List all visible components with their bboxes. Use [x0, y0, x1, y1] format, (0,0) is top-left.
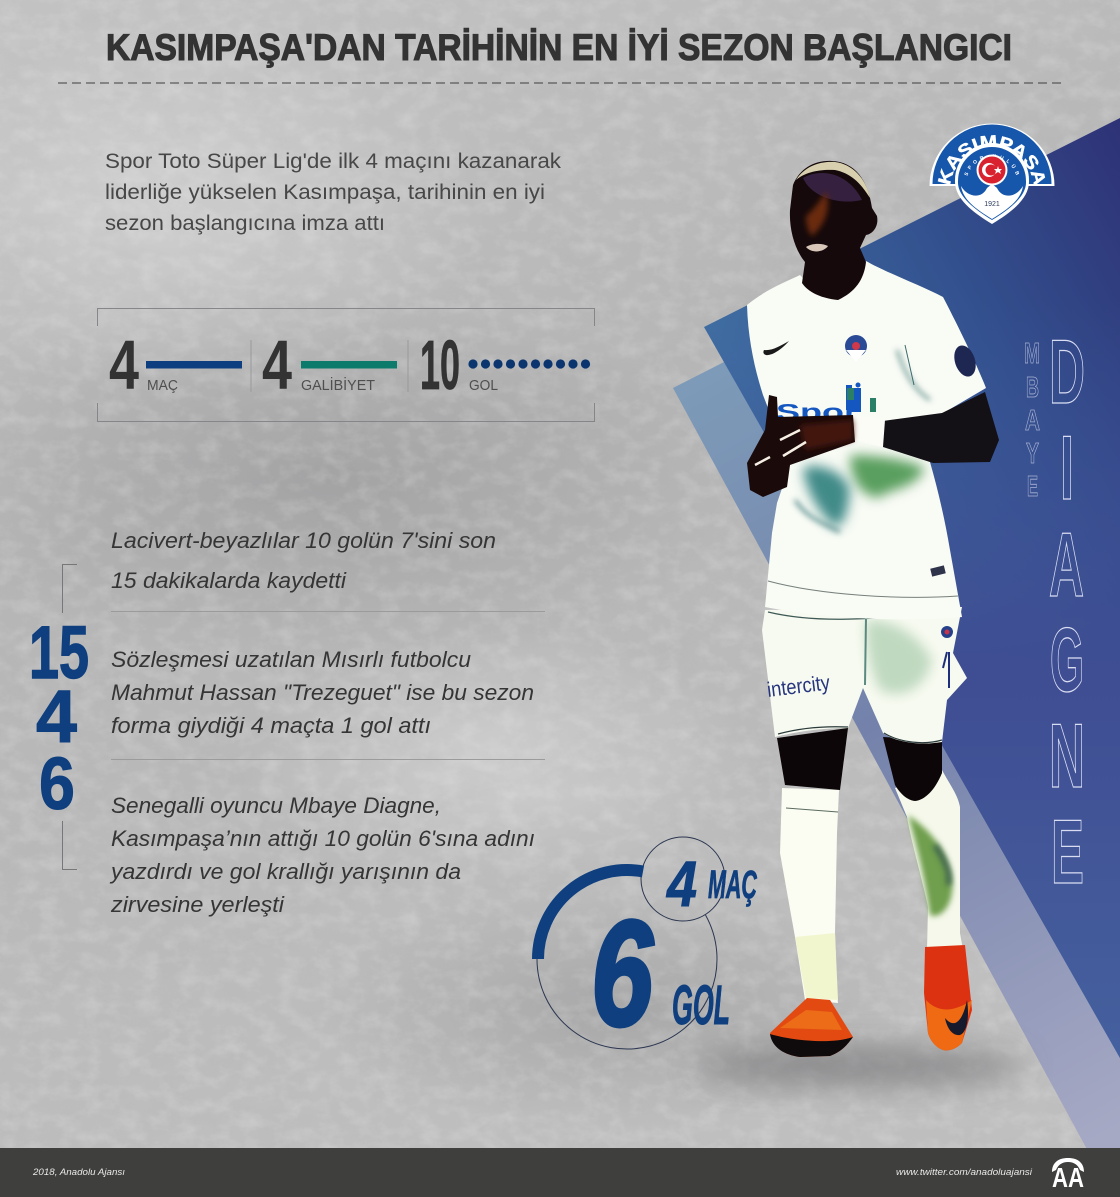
light blue triangle — [673, 160, 1120, 1197]
player: knees — [777, 728, 942, 801]
italic text blocks — [109, 528, 545, 917]
jersey: sponsor: Spor — [776, 399, 858, 425]
jersey: hem tag — [930, 565, 946, 577]
player: right arm — [883, 392, 999, 463]
stat: 4 wins: GALİBİYET — [301, 376, 375, 394]
stat: 10 goals: 10 — [420, 326, 460, 404]
text: last 15 minutes: Lacivert-beyazlılar 10 golün 7'sini son — [111, 528, 496, 553]
player: wristband — [853, 415, 885, 447]
value: 4: 4 — [665, 848, 697, 920]
player: shorts — [762, 607, 967, 744]
label: MAÇ: MAÇ — [708, 863, 757, 907]
vertical name: Mbaye: Y — [1026, 438, 1039, 470]
stat: 4 matches: 4 — [109, 326, 139, 404]
thick arc — [538, 870, 643, 959]
vertical name: Mbaye — [1024, 338, 1040, 503]
crest: banner text: KASIMPAŞA — [938, 135, 1046, 184]
vertical name: Diagne: E — [1051, 802, 1084, 903]
text: last 15 minutes — [111, 528, 496, 593]
text: Trezeguet: forma giydiği 4 maçta 1 gol attı — [111, 713, 431, 738]
player photo illustration — [747, 161, 999, 1057]
intro paragraph: Spor Toto Süper Lig'de ilk 4 maçını kazanarak — [105, 150, 562, 173]
vertical name: Mbaye: M — [1024, 338, 1040, 370]
footer bar — [0, 1148, 1120, 1197]
text: Mbaye Diagne: Senegalli oyuncu Mbaye Diagne, — [111, 793, 441, 818]
value: 6: 6 — [591, 889, 654, 1057]
vertical name: Diagne — [1049, 322, 1085, 903]
crest: year: 1921 — [984, 201, 1000, 208]
dark blue triangle — [704, 118, 1120, 1058]
icon: AA logo: AA — [1052, 1162, 1084, 1193]
footer: credit: 2018, Anadolu Ajansı — [32, 1167, 125, 1178]
ground shadow — [695, 1046, 1025, 1086]
vertical name: Diagne: A — [1049, 515, 1084, 616]
stat: 4 wins: 4 — [262, 326, 292, 404]
crest: spor kulübü: SPOR KULÜBÜ — [964, 154, 1020, 176]
goals and matches circle chart — [537, 837, 757, 1057]
sponsor: intercity: intercity — [766, 671, 832, 702]
crest: flag circle — [976, 154, 1008, 186]
jersey: crest — [845, 335, 867, 362]
stat: 4 matches: MAÇ — [147, 377, 178, 394]
text: Trezeguet: Mahmut Hassan "Trezeguet" ise bu sezon — [111, 680, 534, 705]
intro paragraph: liderliğe yükselen Kasımpaşa, tarihinin en iyi — [105, 181, 545, 204]
footer: twitter: www.twitter.com/anadoluajansi — [896, 1167, 1033, 1178]
number 15: 15 — [29, 611, 89, 694]
panel: season stats — [98, 308, 594, 422]
stat: 4 wins — [262, 326, 397, 404]
text: Trezeguet — [111, 647, 534, 738]
vertical name: Diagne: D — [1049, 322, 1085, 423]
goals and matches circle chart: GOL — [672, 973, 730, 1036]
player: jersey — [747, 261, 986, 620]
stat: 4 matches — [109, 326, 242, 404]
stat: 10 goals — [420, 326, 590, 404]
player: socks — [780, 770, 963, 1003]
vertical name: Diagne: N — [1049, 706, 1085, 807]
player: hands — [747, 395, 855, 497]
vertical name: Diagne: G — [1050, 610, 1084, 711]
left bracket and key numbers — [29, 564, 89, 870]
intro paragraph: sezon başlangıcına imza attı — [105, 212, 385, 235]
text: Mbaye Diagne — [109, 793, 535, 917]
shorts crest and number — [941, 626, 953, 688]
number 6: 6 — [39, 742, 75, 825]
text: Mbaye Diagne: zirvesine yerleşti — [110, 892, 285, 917]
text: Trezeguet: Sözleşmesi uzatılan Mısırlı futbolcu — [111, 647, 471, 672]
text: last 15 minutes: 15 dakikalarda kaydetti — [111, 568, 347, 593]
jersey: sponsor — [776, 382, 876, 425]
vertical name: Mbaye: B — [1026, 372, 1039, 404]
text: Mbaye Diagne: yazdırdı ve gol krallığı yarışının da — [109, 859, 461, 884]
vertical name: Mbaye: E — [1027, 471, 1038, 503]
intro paragraph — [105, 150, 562, 235]
number 4: 4 — [36, 675, 77, 758]
stat: 10 goals: GOL — [469, 377, 498, 394]
vertical name: Diagne: I — [1060, 418, 1074, 519]
title: KASIMPAŞA'DAN TARİHİNİN EN İYİ SEZON BAŞLANGICI — [106, 27, 1012, 68]
crest: anchor — [961, 184, 1023, 219]
thin circles — [537, 837, 725, 1049]
vertical name: Mbaye: A — [1025, 405, 1040, 437]
club crest — [930, 124, 1054, 224]
text: Mbaye Diagne: Kasımpaşa’nın attığı 10 golün 6'sına adını — [111, 826, 535, 851]
player: boots — [770, 945, 972, 1057]
jersey: nike swoosh — [763, 341, 789, 355]
jersey: sleeve patch — [951, 343, 979, 379]
player: head and neck — [790, 161, 877, 300]
